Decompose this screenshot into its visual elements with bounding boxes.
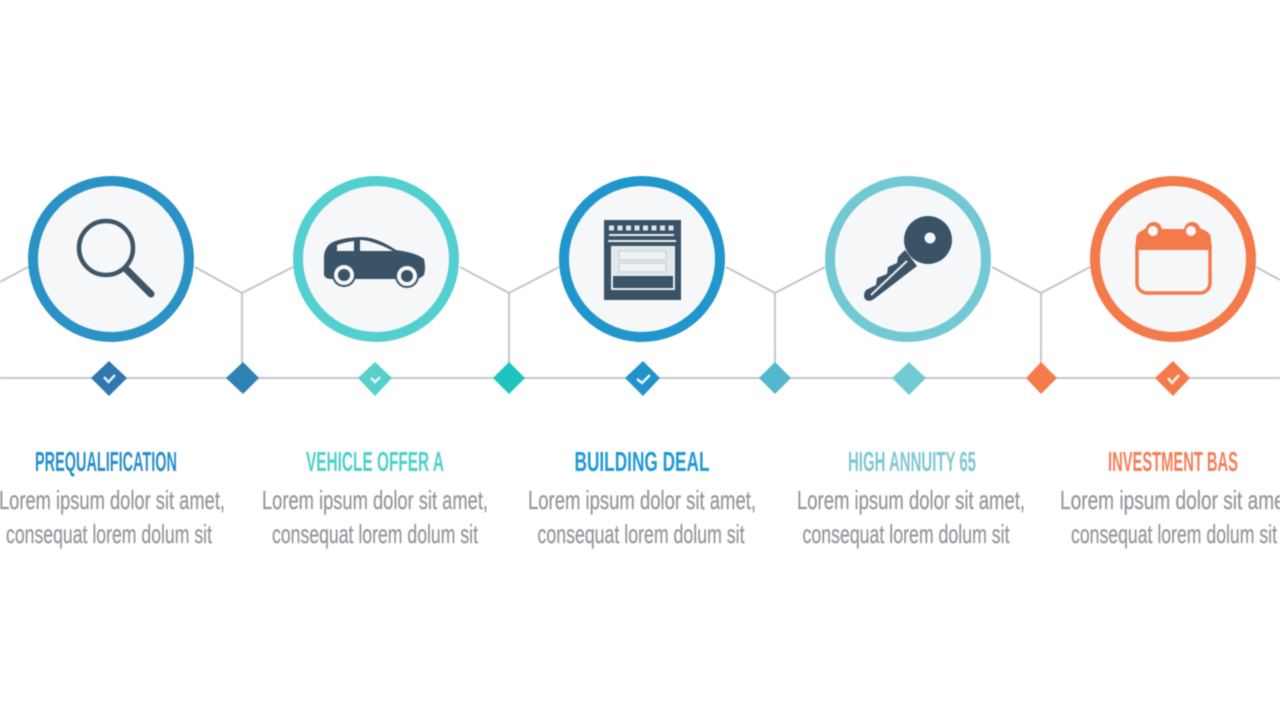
step 1 heading: PREQUALIFICATION [35, 446, 177, 477]
connector lines [0, 267, 1280, 378]
step 5 description [1060, 485, 1280, 549]
step 3 description: Lorem ipsum dolor sit amet, [528, 485, 756, 515]
marker: junction diamond 1 [226, 362, 259, 394]
step 5 text block [1060, 446, 1280, 549]
marker: step 2 check diamond [358, 362, 392, 396]
step 2 circle [298, 181, 454, 337]
step 4 description [797, 485, 1025, 549]
step 1 text block [0, 446, 225, 549]
step 2 description [262, 485, 488, 549]
step 2 heading: VEHICLE OFFER A [306, 446, 444, 477]
marker: junction diamond 3 [759, 362, 791, 394]
icon: magnifying glass [79, 221, 151, 294]
step 2 description: Lorem ipsum dolor sit amet, [262, 485, 488, 515]
step 4 text block [797, 446, 1025, 549]
step 3 heading: BUILDING DEAL [574, 446, 710, 477]
step 3 description: consequat lorem dolum sit [538, 519, 745, 549]
marker: step 1 check diamond [91, 361, 127, 396]
step 2 description: consequat lorem dolum sit [272, 519, 479, 549]
step 2 text block [262, 446, 488, 549]
step 4 description: consequat lorem dolum sit [802, 519, 1010, 549]
icon: calendar [1136, 222, 1211, 293]
icon: car [324, 237, 425, 287]
icon: oven [604, 220, 681, 300]
marker: step 4 diamond [892, 362, 926, 395]
step 4 description: Lorem ipsum dolor sit amet, [797, 485, 1025, 515]
step 3 circle [564, 181, 720, 337]
step 4 heading: HIGH ANNUITY 65 [848, 446, 976, 477]
step 4 circle [830, 181, 986, 337]
icon: key [864, 216, 952, 301]
step 1 description [0, 485, 225, 549]
step 1 description: consequat lorem dolum sit [6, 519, 213, 549]
marker: junction diamond 4 [1026, 362, 1057, 394]
step 1 circle [33, 181, 189, 337]
marker: junction diamond 2 [493, 362, 525, 394]
marker: step 3 check diamond [625, 361, 660, 396]
step 1 description: Lorem ipsum dolor sit amet, [0, 485, 225, 515]
step 3 description [528, 485, 756, 549]
step 3 text block [528, 446, 756, 549]
step 5 circle [1095, 181, 1251, 337]
marker: step 5 check diamond [1155, 361, 1190, 396]
